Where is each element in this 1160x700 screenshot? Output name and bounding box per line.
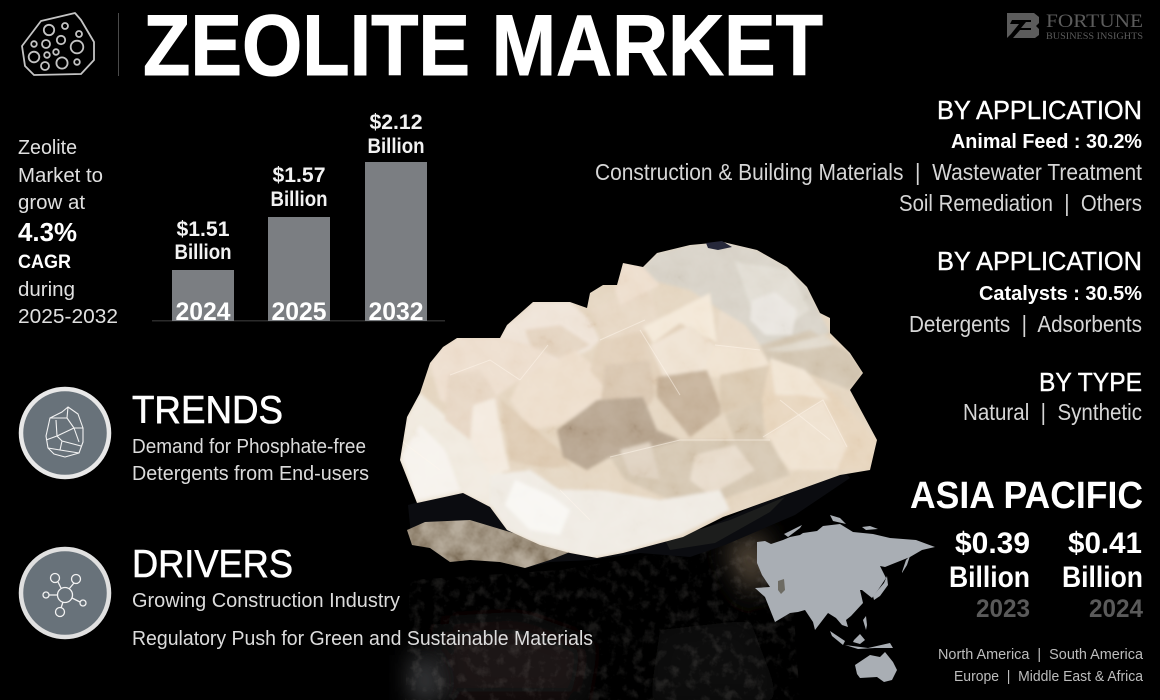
bar: 2032: $2.12 [370, 111, 422, 134]
CAGR text block: grow at [18, 192, 85, 214]
bar: 2032 [365, 111, 427, 326]
mineral base rock [405, 472, 850, 570]
icon: porous zeolite logo [22, 13, 94, 75]
bar: 2025: 2025 [272, 298, 327, 326]
value: 2024: Billion [1062, 561, 1143, 594]
regional lake detail [778, 579, 785, 594]
trends text: Demand for Phosphate-free [132, 436, 366, 458]
reflection of mineral [405, 530, 800, 700]
bar: 2024: 2024 [176, 298, 231, 326]
segment: by application 2 [909, 246, 1142, 337]
bar: 2024: $1.51 [176, 218, 230, 241]
value: 2023: 2023 [976, 595, 1030, 623]
CAGR text block: during [18, 279, 75, 301]
drivers text: Regulatory Push for Green and Sustainable Materials [132, 628, 593, 650]
bar: 2024: Billion [174, 241, 232, 264]
bar: 2025: Billion [270, 188, 328, 211]
mineral crystal cluster [395, 235, 885, 565]
CAGR text block: 2025-2032 [18, 306, 118, 328]
bar: 2024 [172, 218, 234, 326]
bar: 2025 [268, 164, 330, 326]
icon: trends rock [21, 389, 109, 477]
CAGR text block: CAGR [18, 252, 71, 273]
value: 2023 [949, 527, 1030, 623]
segment: by application 1: Animal Feed : 30.2% [951, 131, 1142, 153]
segment: by type: Natural | Synthetic [963, 399, 1142, 425]
segment: by type [963, 367, 1142, 425]
CAGR text block [18, 137, 118, 328]
logo divider [118, 13, 119, 76]
CAGR text block: Zeolite [18, 137, 77, 159]
bar: 2032: Billion [368, 135, 424, 158]
segment: by application 2: BY APPLICATION [937, 246, 1142, 276]
CAGR text block: Market to [18, 165, 103, 187]
value: 2024: $0.41 [1068, 527, 1142, 560]
segment: by type: BY TYPE [1039, 367, 1142, 397]
publisher logo: FORTUNE [1046, 11, 1143, 32]
value: 2024 [1062, 527, 1143, 623]
other regions: Europe | Middle East & Africa [954, 668, 1144, 685]
bar chart [152, 111, 445, 326]
map: asia pacific [755, 515, 935, 682]
bar: 2032: 2032 [368, 298, 424, 326]
publisher logo [1007, 11, 1143, 42]
other regions: North America | South America [938, 646, 1144, 663]
drivers text [132, 590, 593, 650]
drivers heading: DRIVERS [132, 543, 293, 586]
value: 2024: 2024 [1089, 595, 1143, 623]
bar: 2025: $1.57 [272, 164, 326, 187]
value: 2023: $0.39 [955, 527, 1030, 560]
segment: by application 1: BY APPLICATION [937, 95, 1142, 125]
CAGR text block: 4.3% [18, 217, 77, 247]
trends heading: TRENDS [132, 389, 283, 432]
trends text: Detergents from End-users [132, 463, 369, 485]
icon: drivers molecule [21, 549, 109, 637]
publisher logo: BUSINESS INSIGHTS [1046, 32, 1143, 42]
segment: by application 2: Catalysts : 30.5% [979, 283, 1142, 305]
title: ZEOLITE MARKET [143, 0, 823, 94]
mineral blue tip [706, 241, 732, 250]
crystal surface texture [428, 248, 870, 541]
segment: by application 1 [595, 95, 1143, 216]
mineral specimen photograph [395, 235, 885, 570]
trends text [132, 436, 369, 485]
other regions [938, 646, 1144, 685]
value: 2023: Billion [949, 561, 1030, 594]
asia pacific heading: ASIA PACIFIC [910, 475, 1143, 517]
drivers text: Growing Construction Industry [132, 590, 400, 612]
